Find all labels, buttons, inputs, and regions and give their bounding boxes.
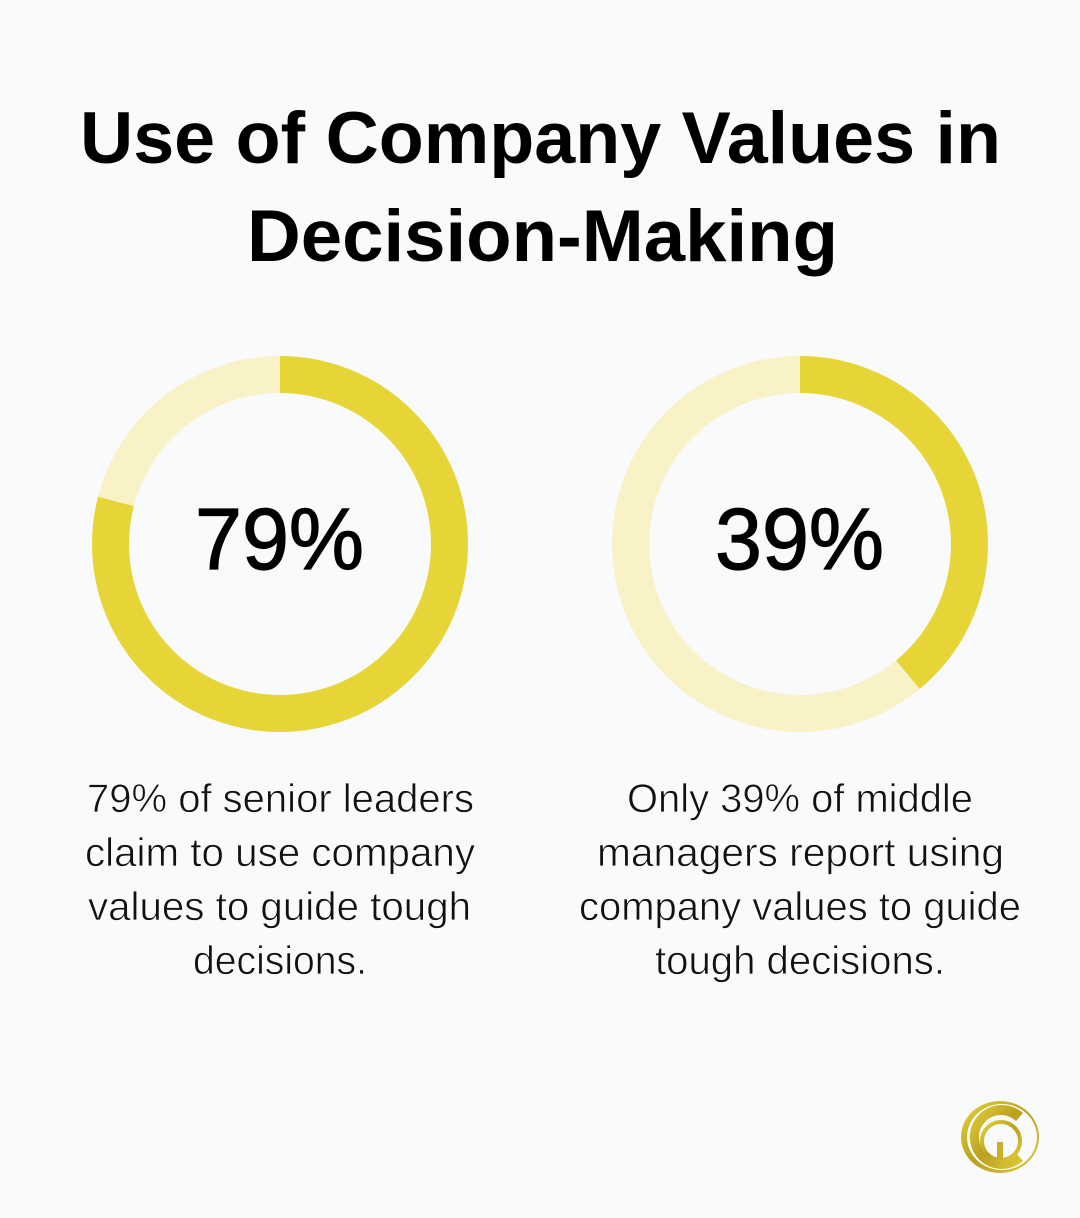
icon: company logo bbox=[961, 1101, 1039, 1173]
description: senior leaders: claim to use company bbox=[85, 831, 475, 875]
description: senior leaders: decisions. bbox=[193, 939, 367, 983]
description: senior leaders: values to guide tough bbox=[88, 885, 471, 929]
description: middle managers: Only 39% of middle bbox=[627, 777, 973, 821]
title bbox=[80, 98, 1001, 277]
donut chart: 79% bbox=[110, 374, 450, 714]
description: senior leaders bbox=[85, 777, 475, 983]
panel: middle managers bbox=[579, 374, 1021, 983]
description: senior leaders: 79% of senior leaders bbox=[87, 777, 474, 821]
value: 79%: 79% bbox=[195, 491, 364, 588]
description: middle managers: managers report using bbox=[597, 831, 1004, 875]
donut chart: 39% bbox=[630, 374, 970, 714]
description: middle managers bbox=[579, 777, 1021, 983]
title: Decision-Making bbox=[247, 196, 838, 277]
value: 39%: 39% bbox=[715, 491, 884, 588]
description: middle managers: company values to guide bbox=[579, 885, 1021, 929]
description: middle managers: tough decisions. bbox=[655, 939, 945, 983]
panel: senior leaders bbox=[85, 374, 475, 983]
title: Use of Company Values in bbox=[80, 98, 1001, 179]
